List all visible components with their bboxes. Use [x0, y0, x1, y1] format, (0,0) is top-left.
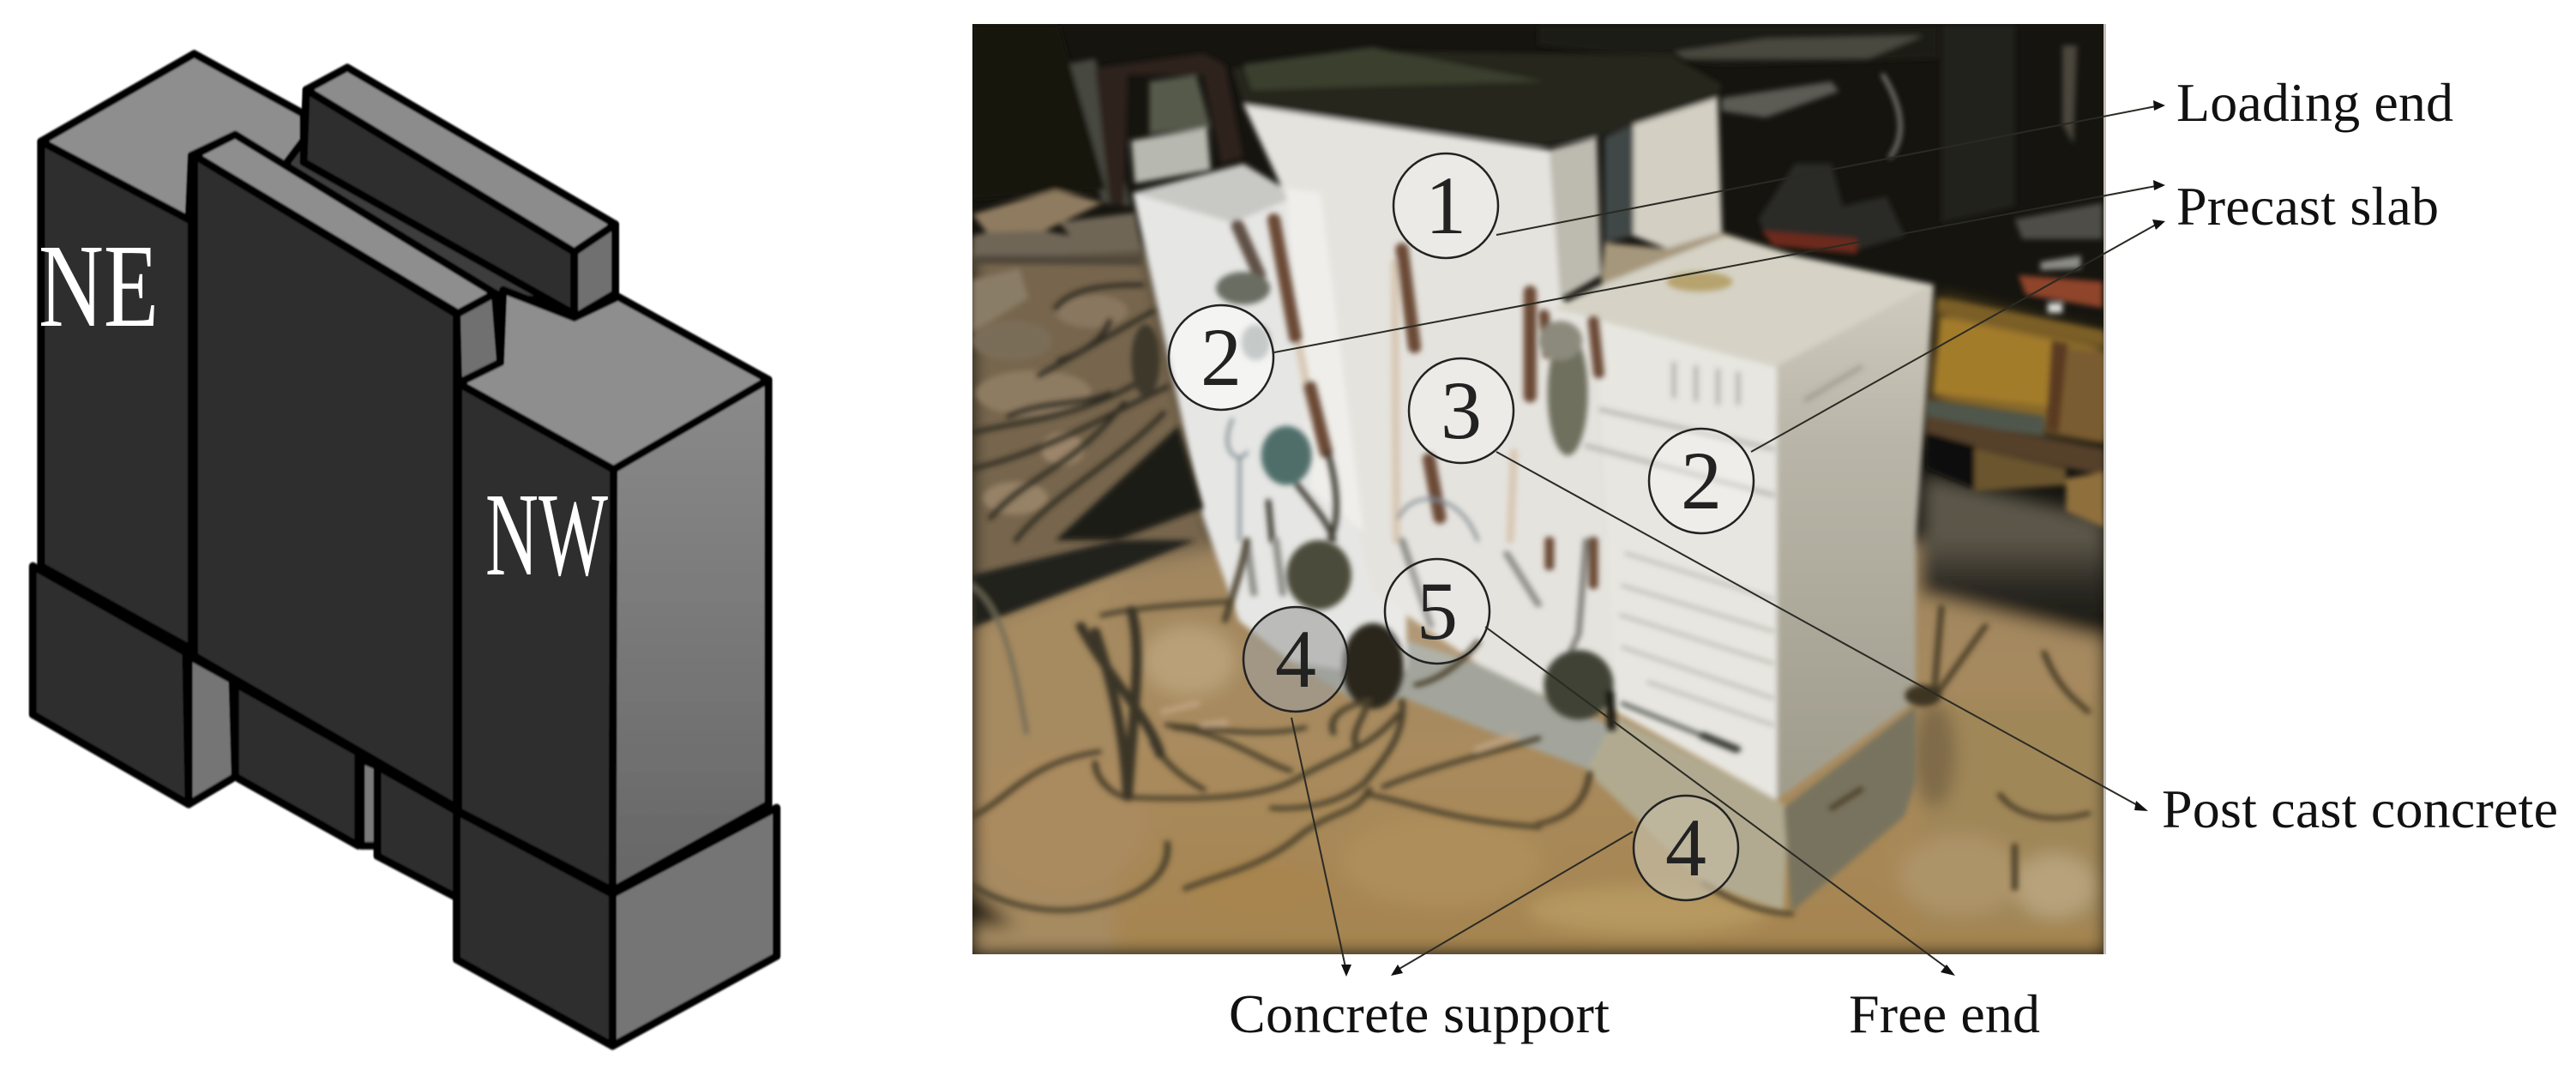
- specimen details, lower left wires: [972, 540, 1538, 911]
- label: Loading end: Loading end: [2176, 72, 2453, 133]
- callout circles with numbers: 4: [1275, 613, 1316, 705]
- specimen details, upper right: [1538, 75, 1900, 495]
- photo right edge strip: [2104, 24, 2106, 954]
- specimen: concrete blocks: [1133, 47, 1934, 912]
- label: Post cast concrete: Post cast concrete: [2162, 778, 2558, 839]
- label: NE: NE: [39, 220, 159, 352]
- label: NW: NW: [485, 469, 608, 601]
- callout circles with numbers: 1: [1425, 159, 1466, 251]
- specimen details, lower right: [1538, 540, 2088, 914]
- background at upper right: machinery, table: [1538, 26, 2104, 528]
- label: Free end: Free end: [1849, 983, 2040, 1044]
- panel: 3D model of specimen: [33, 54, 777, 1046]
- background at upper left: frame, box and planks: [972, 26, 1243, 514]
- label: Precast slab: Precast slab: [2176, 176, 2439, 237]
- callout circles with numbers: 3: [1441, 364, 1482, 456]
- photo: specimen on sand bed: [972, 24, 2110, 954]
- callout circles with numbers: [1169, 153, 1754, 900]
- callout circles with numbers: 4: [1665, 802, 1706, 893]
- label: Concrete support: Concrete support: [1229, 983, 1610, 1044]
- callout circles with numbers: 2: [1201, 311, 1242, 403]
- callout circles with numbers: 2: [1681, 435, 1722, 526]
- specimen details, upper left: [972, 219, 1530, 540]
- leader lines and arrows: [1274, 100, 2165, 977]
- callout circles with numbers: 5: [1417, 565, 1458, 657]
